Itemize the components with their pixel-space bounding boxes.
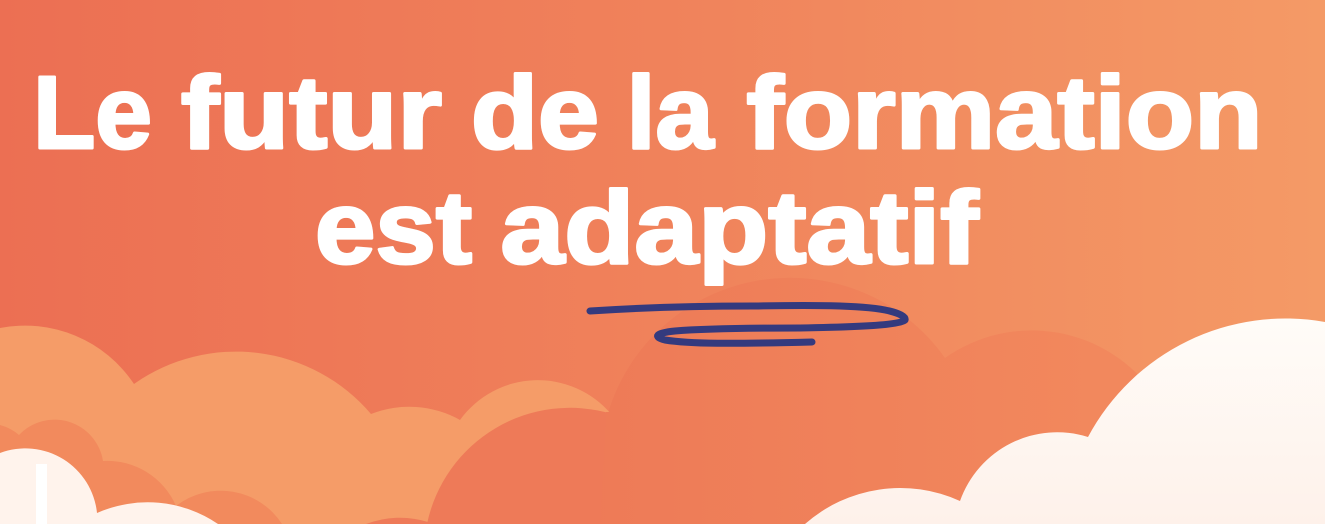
title line 2: adaptatif (500, 170, 979, 285)
title line 1: futur (181, 55, 442, 170)
title line 1: Le (33, 55, 152, 170)
cloud: cream left layer (0, 448, 218, 524)
cloud: small darker orange left layer (0, 420, 282, 524)
title line 1: de (471, 55, 599, 170)
hand-drawn underline (590, 305, 905, 343)
cloud: back mid-tone layer (600, 278, 1155, 524)
title line 2 (315, 170, 979, 285)
title line 1 (33, 55, 1262, 170)
cloud: cream right layer (805, 319, 1325, 524)
title line 1: la (626, 55, 714, 170)
cloud: front orange layer (366, 408, 1000, 524)
title (33, 55, 1262, 285)
cloud: light orange layer (0, 326, 611, 524)
title line 1: formation (746, 55, 1262, 170)
title line 2: est (315, 170, 472, 285)
white vertical bar (36, 464, 47, 524)
